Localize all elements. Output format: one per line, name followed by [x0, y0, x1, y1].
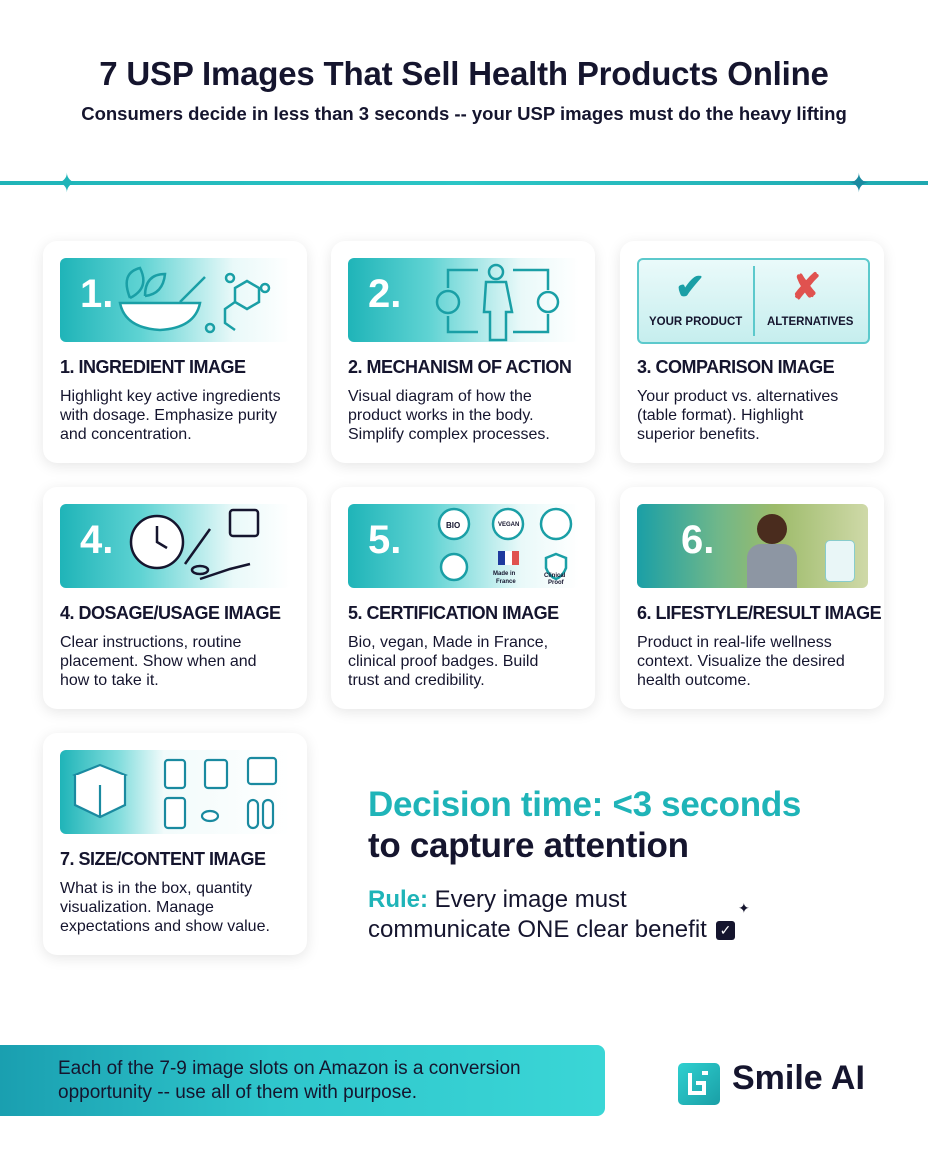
panel: ingredient: 1. INGREDIENT IMAGE — [60, 357, 246, 377]
panel: comparison: Your product vs. alternatives — [637, 388, 838, 405]
callout: decision time: Decision time: <3 seconds — [368, 785, 801, 824]
icon: clock and dropper — [130, 508, 260, 580]
callout: decision time: to capture attention — [368, 826, 689, 865]
panel: ingredient: and concentration. — [60, 426, 192, 443]
divider line with sparkles: ✦ — [848, 168, 870, 198]
icon: badges: Clinical — [544, 573, 566, 579]
panel: mechanism: Visual diagram of how the — [348, 388, 532, 405]
icon: comparison table: ALTERNATIVES — [767, 316, 853, 328]
panel: certification: 5. — [368, 518, 401, 562]
panel: size/content: visualization. Manage — [60, 899, 214, 916]
icon: badges: Proof — [548, 580, 565, 586]
panel: size/content: expectations and show value. — [60, 918, 270, 935]
panel: dosage: 4. — [80, 518, 113, 562]
title: 7 USP Images That Sell Health Products Online — [99, 55, 829, 92]
panel: ingredient: Highlight key active ingredients — [60, 388, 281, 405]
icon: comparison table: YOUR PRODUCT — [649, 316, 742, 328]
icon: comparison table — [637, 258, 870, 344]
panel: lifestyle — [620, 487, 884, 709]
panel: dosage — [43, 487, 307, 709]
panel: mechanism: 2. MECHANISM OF ACTION — [348, 357, 571, 377]
logo: Smile AI: Smile AI — [732, 1059, 865, 1097]
panel: ingredient — [43, 241, 307, 463]
panel: lifestyle: context. Visualize the desired — [637, 653, 845, 670]
panel: comparison: superior benefits. — [637, 426, 760, 443]
panel: comparison — [620, 241, 884, 463]
panel: certification — [331, 487, 595, 709]
panel: dosage: Clear instructions, routine — [60, 634, 241, 651]
callout: decision time: ✓ — [720, 922, 731, 938]
icon: comparison table: ✘ — [791, 266, 821, 307]
panel: comparison: 3. COMPARISON IMAGE — [637, 357, 834, 377]
icon: comparison table: ✔ — [675, 266, 705, 307]
callout: decision time: ✦ — [738, 900, 750, 916]
icon: body diagram — [436, 264, 560, 342]
callout: decision time — [368, 785, 801, 943]
panel: mechanism: product works in the body. — [348, 407, 534, 424]
panel: mechanism: 2. — [368, 272, 401, 316]
callout: decision time: communicate ONE clear benefit — [368, 916, 707, 943]
panel: lifestyle: health outcome. — [637, 672, 751, 689]
panel: ingredient: 1. — [80, 272, 113, 316]
panel: dosage: how to take it. — [60, 672, 159, 689]
icon: lifestyle photo: 6. — [681, 518, 714, 562]
divider line with sparkles: ✦ — [56, 168, 78, 198]
panel: certification: clinical proof badges. Build — [348, 653, 538, 670]
panel: certification: trust and credibility. — [348, 672, 485, 689]
panel: certification: Bio, vegan, Made in France, — [348, 634, 548, 651]
logo: Smile AI — [678, 1059, 865, 1105]
panel: lifestyle: 6. LIFESTYLE/RESULT IMAGE — [637, 603, 881, 623]
icon: badges: France — [496, 579, 516, 585]
panel: size/content: What is in the box, quantity — [60, 880, 252, 897]
panel: certification: 5. CERTIFICATION IMAGE — [348, 603, 559, 623]
icon: lifestyle photo — [637, 504, 868, 588]
subtitle: Consumers decide in less than 3 seconds -- your USP images must do the heavy lifting — [81, 103, 847, 124]
footer banner: Each of the 7-9 image slots on Amazon is a conversion — [58, 1058, 521, 1079]
icon: badges: VEGAN — [498, 522, 519, 528]
icon: mortar and molecule — [118, 266, 270, 334]
footer banner — [0, 1045, 605, 1116]
panel: mechanism — [331, 241, 595, 463]
panel: ingredient: with dosage. Emphasize purity — [60, 407, 277, 424]
panel: lifestyle: Product in real-life wellness — [637, 634, 832, 651]
panel: mechanism: Simplify complex processes. — [348, 426, 550, 443]
footer banner: opportunity -- use all of them with purpose. — [58, 1082, 417, 1103]
icon: badges: BIO — [446, 521, 460, 530]
panel: dosage: 4. DOSAGE/USAGE IMAGE — [60, 603, 281, 623]
icon: box and bottles — [72, 756, 278, 830]
panel: size/content — [43, 733, 307, 955]
divider line with sparkles — [0, 168, 928, 198]
panel: size/content: 7. SIZE/CONTENT IMAGE — [60, 849, 266, 869]
icon: badges — [438, 508, 572, 586]
panel: dosage: placement. Show when and — [60, 653, 257, 670]
panel: comparison: (table format). Highlight — [637, 407, 803, 424]
icon: badges: Made in — [493, 571, 516, 577]
callout: decision time: Rule: Every image must — [368, 886, 627, 913]
